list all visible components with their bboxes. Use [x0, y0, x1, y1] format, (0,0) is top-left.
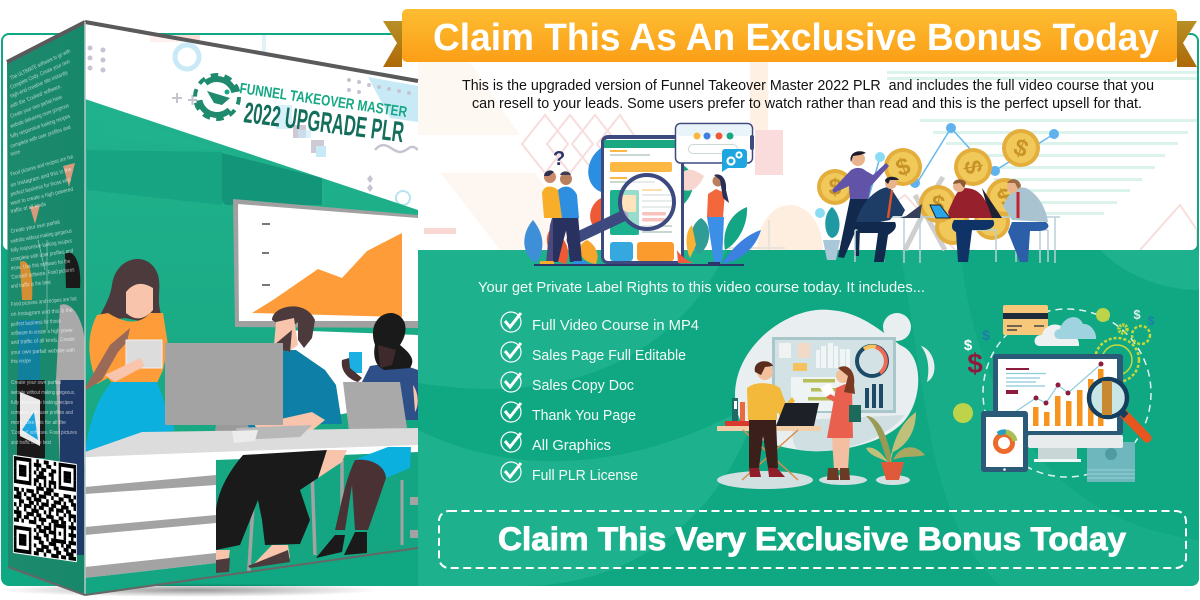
- coins and dollar signs: $: [982, 327, 990, 343]
- growth line: [815, 123, 1059, 218]
- clouds: [1035, 317, 1096, 346]
- yellow gears: [1095, 325, 1150, 382]
- side panel small print: fully responsive looking recipes: [10, 114, 71, 140]
- check item: Full PLR License: Full PLR License: [532, 467, 638, 484]
- phone: [601, 135, 684, 264]
- check item: Full Video Course in MP4: [501, 312, 699, 334]
- desk items: [725, 398, 749, 426]
- intro text: This is the upgraded version of Funnel Takeover Master 2022 PLR and includes the full video course that you: [462, 77, 1154, 94]
- tablet: [981, 411, 1028, 472]
- desktop monitor: [165, 343, 283, 431]
- background decoration: green swooshes: [418, 250, 1199, 586]
- product box: [0, 22, 418, 600]
- plants right: [677, 207, 761, 264]
- ground line: [534, 264, 744, 266]
- logo line two: 2022 UPGRADE PLR: [242, 97, 406, 149]
- gear icon: [192, 72, 242, 122]
- laptops: [900, 188, 1002, 218]
- grey arrow: [905, 177, 945, 250]
- illustration: team at dashboard board: [717, 310, 935, 489]
- check item: Full Video Course in MP4: Full Video Course in MP4: [532, 317, 699, 334]
- wall chart board: [233, 199, 418, 328]
- side panel small print: Food pictures and recipes are hot: [11, 296, 77, 308]
- woman's legs: [316, 447, 418, 558]
- side panel small print: 'Cooked' software. Food pictures: [11, 430, 77, 436]
- speech bubble gears: [722, 149, 747, 172]
- seated man middle: [948, 179, 994, 262]
- woman with coffee: [342, 313, 418, 431]
- gold coins: $: [958, 158, 987, 177]
- check item: Full PLR License: [501, 462, 638, 484]
- side panel small print: perfect business for those who: [10, 177, 72, 198]
- magnifying glass: [572, 175, 674, 240]
- floor shadows: [717, 471, 910, 489]
- background decoration: top panel pattern: [160, 33, 1197, 250]
- desk: [85, 425, 418, 578]
- side panel small print: complete with user profiles and: [10, 248, 74, 263]
- gold coins: $: [1010, 133, 1032, 164]
- side panel small print: website without making gorgeous: [10, 228, 73, 245]
- check item: Sales Copy Doc: Sales Copy Doc: [532, 377, 634, 394]
- side panel small print: your own parfait website with: [11, 348, 75, 356]
- backdrop blob: [735, 310, 935, 451]
- check item: All Graphics: All Graphics: [532, 437, 611, 454]
- woman in red dress: [820, 366, 861, 480]
- front green field: [85, 99, 418, 595]
- check item: Thank You Page: Thank You Page: [532, 407, 636, 424]
- side panel small print: Create your own parfait: [11, 380, 61, 386]
- box edges: [7, 22, 418, 595]
- front top decoration: [88, 30, 418, 205]
- side panel small print: Food pictures and recipes are hot: [10, 154, 74, 178]
- coins and dollar signs: $: [1148, 314, 1155, 328]
- side panel small print: on Instagram and this is the: [10, 167, 72, 189]
- side panel small print: complete with user profiles and: [10, 125, 72, 150]
- credit card: [1003, 305, 1048, 335]
- side panel small print: more. Use this software for the: [11, 259, 71, 272]
- subheading: Your get Private Label Rights to this video course today. It includes...: [478, 279, 925, 296]
- intro text: [462, 77, 1154, 112]
- question mark: ?: [553, 148, 565, 170]
- coins and dollar signs: $: [967, 348, 983, 379]
- checklist: [501, 312, 699, 484]
- standing woman: [832, 151, 889, 258]
- seated man right: [1003, 179, 1048, 262]
- woman standing: [707, 174, 729, 265]
- side panel small print: on Instagram and this is the: [11, 308, 73, 318]
- two men thinking: [540, 170, 587, 265]
- side panel small print: perfect business for those: [11, 319, 61, 328]
- illustration: phone search with people: [524, 124, 761, 266]
- gold coins: $: [929, 190, 947, 219]
- table: [717, 426, 821, 480]
- gold coins: $: [993, 182, 1018, 212]
- banner ribbon: [383, 9, 1197, 67]
- intro text: can resell to your leads. Some users prefer to watch rather than read and this is the perfect upsell for that.: [472, 95, 1142, 112]
- side panel small print: more: [10, 149, 21, 158]
- check item: All Graphics: [501, 432, 611, 454]
- gold coins: $: [892, 152, 915, 182]
- side panel small print: software to create a high power: [11, 328, 73, 337]
- side panel small print: and traffic of all kinds. Create: [11, 337, 75, 346]
- side panel small print: want to create a high powered: [9, 187, 74, 207]
- side panel small print: and traffic is the best: [11, 440, 51, 446]
- side panel small print: website delivering more gorgeous: [9, 103, 70, 130]
- magnifier: [1089, 379, 1147, 438]
- laptop: [776, 403, 819, 426]
- side panel small print: website without making gorgeous,: [10, 390, 75, 396]
- back wall white: [291, 330, 418, 414]
- call to action button: [439, 511, 1186, 568]
- bottom box strip: [86, 563, 216, 578]
- seated man left: [856, 177, 905, 262]
- side panel small print: and traffic is the best: [11, 280, 51, 290]
- side panel small print: this recipe: [11, 358, 31, 365]
- side panel small print: 'Cooked' software. Food pictures: [11, 267, 75, 281]
- table and chairs: [855, 217, 1060, 263]
- dashed orbit: [983, 309, 1151, 477]
- box front panel: [85, 22, 418, 600]
- coins and dollar signs: $: [964, 337, 973, 354]
- side panel small print: Create your own parfait have: [10, 95, 63, 120]
- box ground shadow: [0, 583, 380, 597]
- woman with tablet: [85, 259, 175, 452]
- gold coins: $: [829, 174, 842, 200]
- banner bar: [402, 9, 1177, 62]
- man's legs and chair: [216, 450, 347, 584]
- illustration: analytics monitor: [953, 305, 1155, 482]
- logo line one: FUNNEL TAKEOVER MASTER: [238, 80, 408, 121]
- QR code: [13, 455, 77, 562]
- browser card: [676, 124, 754, 163]
- ribbon tail right: [1177, 21, 1197, 67]
- cash stack: [1087, 442, 1135, 482]
- ribbon tail left: [383, 21, 402, 67]
- side panel small print: The ULTIMATE software to go with: [9, 48, 72, 82]
- side panel small print: Complete Cody. Create your own: [9, 59, 71, 91]
- call to action label: Claim This Very Exclusive Bonus Today: [498, 521, 1126, 557]
- side panel ghost figures: [17, 163, 85, 555]
- check item: Thank You Page: [501, 402, 636, 424]
- monitor: [993, 354, 1123, 462]
- side panel small print: more. Use this for all the: [11, 420, 66, 426]
- side panel small print: Create your own parfait: [10, 219, 61, 235]
- gold coins: [817, 129, 1040, 245]
- check item: Sales Page Full Editable: [501, 342, 686, 364]
- plant in pot: [866, 412, 925, 480]
- box brand logo: [192, 72, 408, 149]
- side panel small print: fully responsive looking recipes: [10, 238, 73, 254]
- man in yellow shirt: [747, 361, 795, 477]
- man at computer: [248, 306, 342, 430]
- check item: Sales Page Full Editable: Sales Page Full Editable: [532, 347, 686, 364]
- side panel small print: traffic of all kinds: [10, 202, 47, 215]
- potted plant: [823, 207, 840, 260]
- box side panel: [7, 22, 85, 599]
- plants behind phone: [524, 148, 704, 264]
- coins and dollar signs: $: [1133, 307, 1141, 322]
- side panel small print: [9, 48, 77, 446]
- side panel small print: fully responsive looking recipes: [11, 400, 73, 406]
- dashboard board: [772, 337, 896, 413]
- coins and dollar signs: [953, 307, 1155, 423]
- illustration: business team with coins: [815, 123, 1060, 263]
- side panel small print: complete with user profiles and: [11, 410, 73, 416]
- side panel small print: high-end creative site instantly: [9, 70, 69, 100]
- check item: Sales Copy Doc: [501, 372, 634, 394]
- side panel small print: with the 'Cooked' software.: [9, 84, 63, 110]
- title: Claim This As An Exclusive Bonus Today: [433, 17, 1159, 59]
